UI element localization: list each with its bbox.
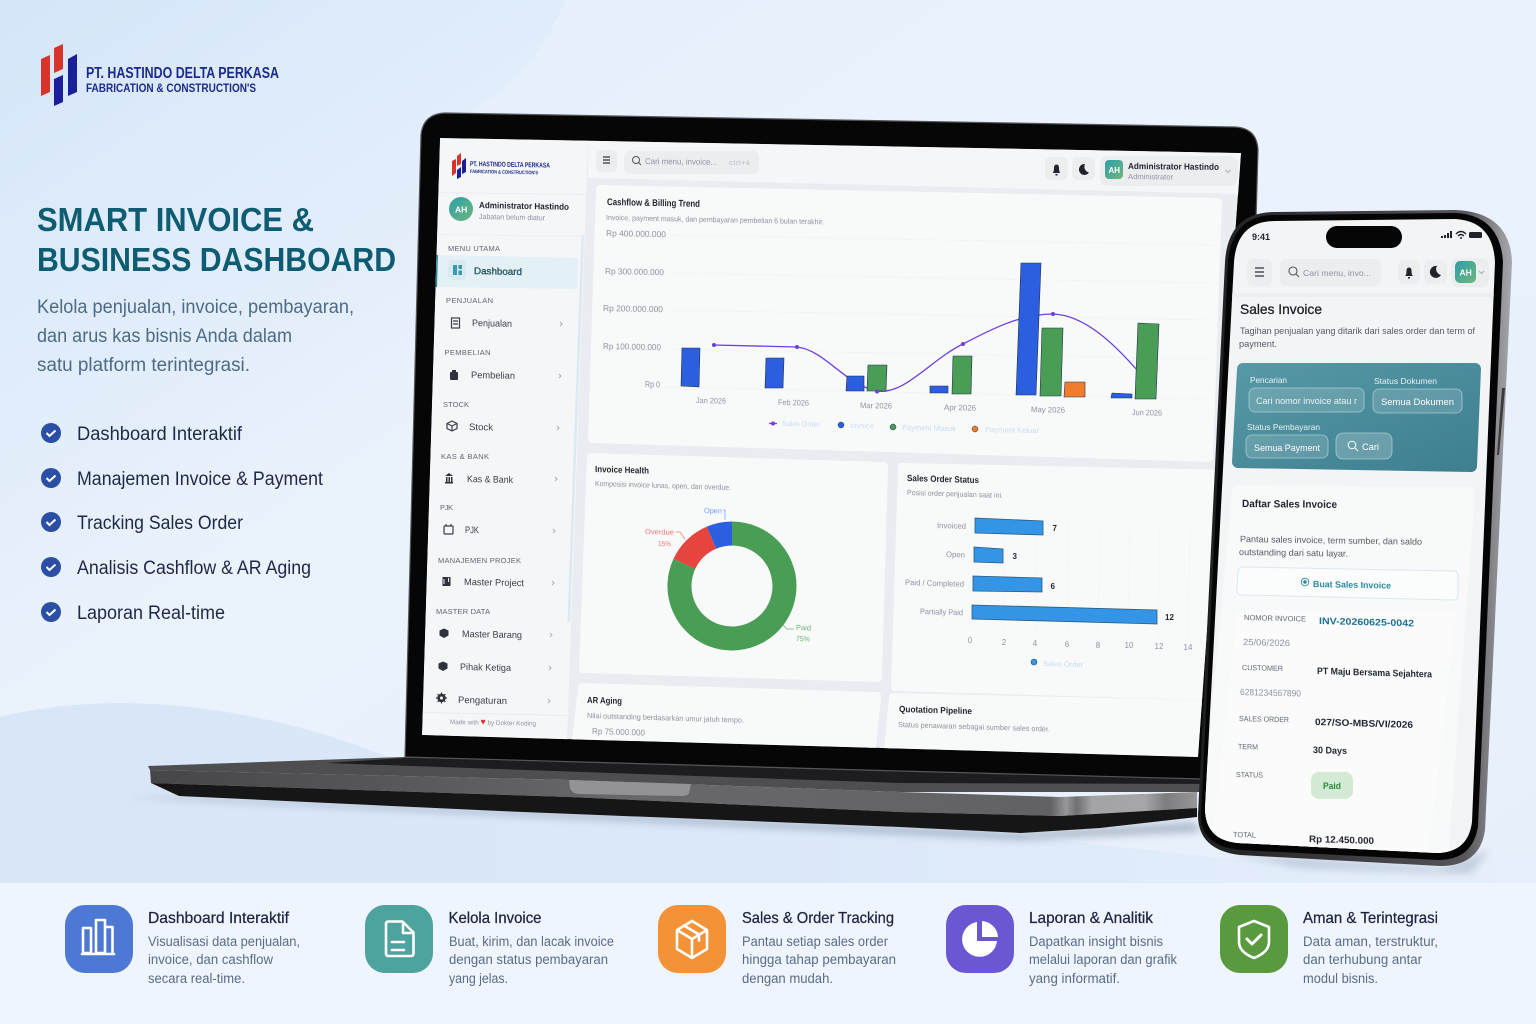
list card: outstanding dari satu layar. [1239,547,1348,559]
sidebar logo: PT. HASTINDO DELTA PERKASA [470,161,550,170]
bar legend [1030,658,1083,668]
bar values: 12 [1165,613,1174,622]
chart legend: Sales Order [782,419,820,429]
user chip [1100,156,1238,186]
card: AR aging: Rp 75.000.000 [592,726,645,738]
sidebar logo [452,153,550,179]
x axis labels: Mar 2026 [860,401,893,411]
y axis labels: Rp 300.000.000 [605,266,664,277]
feature checklist: Analisis Cashflow & AR Aging [77,558,311,579]
subtitle: Kelola penjualan, invoice, pembayaran, [37,297,354,318]
chart legend: Payment Keluar [985,425,1039,435]
icon: pie chart [946,905,1014,973]
feature: laporan dan analitik [946,905,1177,986]
phone body [1198,210,1512,866]
laptop lid [405,113,1258,780]
invoice detail card: INV-20260625-0042 [1319,616,1414,629]
phone top bar: AH [1460,268,1472,278]
filter panel: Semua Dokumen [1381,397,1454,408]
x axis labels: Jan 2026 [696,396,726,406]
donut chart [679,534,784,638]
hamburger button [596,150,617,172]
invoice detail card: CUSTOMER [1242,663,1284,673]
icon: shield [1220,905,1288,973]
filter panel: Semua Payment [1254,443,1320,454]
feature: aman dan terintegrasi: modul bisnis. [1303,971,1378,986]
search box: Cari menu, invoice... [645,156,717,167]
card: cashflow and billing trend: Invoice, payment masuk, dan pembayaran pembelian 6 bulan terakhir. [606,213,824,226]
feature: sales and order tracking: Pantau setiap sales order [742,934,888,949]
feature: dashboard interaktif: secara real-time. [148,971,245,986]
horizontal bars [972,518,1157,624]
title [37,201,396,278]
card: AR aging: Nilai outstanding berdasarkan umur jatuh tempo. [587,711,744,725]
laptop [125,113,1258,840]
create invoice button: Buat Sales Invoice [1313,579,1391,591]
bar labels: Paid / Completed [905,578,964,589]
icon: document [365,905,433,973]
feature checklist: Dashboard Interaktif [77,424,243,445]
donut labels: 15% [658,539,671,548]
x axis labels [696,398,1162,416]
feature: aman dan terintegrasi: Aman & Terintegrasi [1303,910,1438,927]
card: sales order status: Sales Order Status [907,473,979,485]
donut labels [645,506,811,643]
bar labels: Invoiced [937,521,966,531]
card: invoice health: Komposisi invoice lunas, open, dan overdue. [595,479,731,492]
card: quotation pipeline: Quotation Pipeline [899,704,972,716]
x axis values: 4 [1033,639,1038,648]
invoice detail card: 30 Days [1313,745,1347,757]
status bar [1252,226,1482,248]
feature: kelola invoice [365,905,614,986]
y axis labels: Rp 0 [645,379,660,389]
sidebar user [449,197,570,222]
filter panel: Status Pembayaran [1247,422,1320,432]
sidebar user: Administrator Hastindo [479,200,570,212]
card: invoice health: Invoice Health [595,464,649,476]
top bar [588,140,1241,194]
sidebar menu items: Stock [469,422,493,433]
card: sales order status [895,467,1240,697]
trend points [712,312,1055,394]
laptop screen [422,138,1241,790]
x axis values: 10 [1125,641,1134,650]
feature: laporan dan analitik: Dapatkan insight bisnis [1029,934,1163,949]
invoice detail card: PT Maju Bersama Sejahtera [1317,666,1433,680]
feature: sales and order tracking [658,905,896,986]
invoice detail card: 027/SO-MBS/VI/2026 [1315,717,1413,731]
invoice detail card: TOTAL [1233,830,1256,840]
x axis labels: Feb 2026 [778,398,809,408]
bar labels [905,521,966,617]
card: sales order status: Posisi order penjualan saat ini. [907,488,1003,500]
search box [624,151,759,174]
card: cashflow and billing trend: Cashflow & Billing Trend [607,197,700,210]
invoice detail card: STATUS [1236,770,1263,780]
sidebar section labels: PEMBELIAN [444,348,490,357]
y axis labels: Rp 400.000.000 [606,228,666,239]
page heading: Tagihan penjualan yang ditarik dari sales order dan term of [1240,326,1475,337]
title: BUSINESS DASHBOARD [37,241,396,278]
feature: laporan dan analitik: melalui laporan dan grafik [1029,952,1177,967]
bar values: 7 [1052,524,1058,533]
feature: kelola invoice: yang jelas. [449,971,508,986]
feature: kelola invoice: Kelola Invoice [448,910,542,927]
list card: Daftar Sales Invoice [1242,498,1337,511]
y axis labels: Rp 200.000.000 [603,303,663,314]
chart legend: Payment Masuk [902,423,956,433]
invoice detail card: Paid [1323,781,1341,792]
filter panel: Status Dokumen [1374,376,1437,386]
sidebar section labels: MANAJEMEN PROJEK [438,556,521,565]
sidebar user: Jabatan belum diatur [479,212,545,222]
sidebar menu items: Pihak Ketiga [460,662,512,674]
donut labels: Overdue [645,527,674,537]
invoice detail card: 25/06/2026 [1243,637,1290,648]
list card [1205,500,1458,853]
feature: sales and order tracking: hingga tahap pembayaran [742,952,896,967]
x axis values: 12 [1155,642,1164,651]
y axis labels [603,228,666,389]
icon: box [658,905,726,973]
icon: bar chart [65,905,133,973]
card: quotation pipeline [884,693,1202,757]
subtitle [37,297,354,376]
x axis values: 14 [1184,643,1193,652]
page heading [1239,301,1475,350]
y axis labels: Rp 100.000.000 [603,341,661,352]
sidebar menu items: Master Barang [462,629,522,641]
feature checklist: Tracking Sales Order [77,513,244,534]
feature checklist: Manajemen Invoice & Payment [77,469,324,490]
sidebar section labels [436,244,521,616]
user chip: AH [1108,166,1120,175]
feature: sales and order tracking: Sales & Order Tracking [742,910,894,927]
phone top bar: Cari menu, invo... [1303,268,1371,278]
feature checklist [41,423,324,624]
sidebar menu items: Pembelian [471,370,515,382]
menu: dashboard [435,255,578,289]
laptop base [148,757,1240,833]
bar legend: Sales Order [1043,659,1083,669]
invoice detail card: SALES ORDER [1239,714,1290,724]
search box: ctrl+k [729,158,750,167]
notification button [1045,157,1068,180]
card: quotation pipeline: Status penawaran sebagai sumber sales order. [898,720,1050,734]
sidebar logo: FABRICATION & CONSTRUCTION'S [470,169,539,176]
feature checklist: Laporan Real-time [77,603,225,624]
phone [1190,210,1512,900]
phone side button [1497,388,1505,455]
sidebar menu items: Master Project [464,577,524,589]
sidebar menu items [436,318,562,707]
invoice detail card: NOMOR INVOICE [1244,613,1306,624]
feature: dashboard interaktif: Dashboard Interaktif [148,910,290,927]
bottom feature band [0,883,1536,1024]
invoice detail card: 6281234567890 [1240,687,1301,699]
feature: sales and order tracking: dengan mudah. [742,971,833,986]
feature: laporan dan analitik: yang informatif. [1029,971,1120,986]
donut labels: Open [704,506,722,516]
x axis labels: May 2026 [1031,405,1066,415]
donut labels: 75% [796,634,810,643]
subtitle: satu platform terintegrasi. [37,355,250,376]
chart legend [769,420,1039,434]
filter panel: Pencarian [1250,375,1287,385]
filter panel [1238,369,1475,466]
sidebar menu items: Kas & Bank [467,474,513,486]
invoice detail card [1215,613,1452,850]
sidebar section labels: KAS & BANK [441,452,489,461]
feature: laporan dan analitik: Laporan & Analitik [1029,910,1154,927]
feature: kelola invoice: Buat, kirim, dan lacak invoice [449,934,614,949]
sidebar section labels: MASTER DATA [436,607,490,616]
donut labels: Paid [796,623,811,632]
x axis values [968,637,1192,650]
card: AR aging: AR Aging [587,695,622,706]
create invoice button [1237,567,1458,600]
x axis values: 0 [968,636,973,645]
sidebar section labels: PENJUALAN [446,296,493,305]
filter panel: Cari nomor invoice atau r [1256,396,1357,407]
x axis values: 2 [1002,638,1007,647]
bars [681,263,1159,399]
phone screen [1205,219,1495,853]
user chip: Administrator Hastindo [1128,161,1220,172]
card: cashflow and billing trend [592,189,1218,458]
bar values: 6 [1050,582,1056,591]
feature: dashboard interaktif [65,905,300,986]
logo: FABRICATION & CONSTRUCTION'S [86,81,256,95]
invoice detail card: Rp 12.450.000 [1309,834,1374,847]
feature: kelola invoice: dengan status pembayaran [449,952,608,967]
user chip: Administrator [1128,172,1174,181]
feature: dashboard interaktif: Visualisasi data penjualan, [148,934,300,949]
status bar: 9:41 [1252,232,1271,243]
sidebar menu items: Pengaturan [458,695,507,707]
subtitle: dan arus kas bisnis Anda dalam [37,326,292,347]
phone bezel [1201,213,1503,860]
feature: aman dan terintegrasi: Data aman, terstruktur, [1303,934,1438,949]
chart legend: Invoice [850,421,874,430]
bar labels: Open [946,550,965,560]
x axis values: 8 [1096,641,1101,650]
invoice detail card: TERM [1238,742,1258,751]
feature: aman dan terintegrasi [1220,905,1438,986]
menu: dashboard: Dashboard [474,266,522,278]
sidebar footer: Made with ♥ by Dokter Koding [450,716,536,728]
sidebar menu items: PJK [465,525,480,536]
feature: dashboard interaktif: invoice, dan cashflow [148,952,273,967]
bar values [1012,524,1174,622]
x axis labels: Jun 2026 [1132,408,1162,418]
sidebar [422,138,588,740]
logo: PT. HASTINDO DELTA PERKASA [86,65,279,82]
trend line [714,314,1137,391]
x axis values: 6 [1065,640,1070,649]
sidebar section labels: PJK [440,503,453,512]
card: invoice health [583,457,884,678]
logo [41,44,279,106]
bar labels: Partially Paid [920,607,963,617]
page heading: payment. [1239,339,1277,350]
sidebar user: AH [455,204,467,214]
theme button [1072,157,1095,180]
card: AR aging [572,683,881,748]
filter panel: Cari [1362,442,1379,453]
bar values: 3 [1012,552,1018,561]
x axis labels: Apr 2026 [944,403,977,413]
list card: Pantau sales invoice, term sumber, dan saldo [1240,534,1422,547]
title: SMART INVOICE & [37,201,314,238]
phone top bar [1232,261,1494,297]
sidebar section labels: STOCK [443,400,469,409]
page heading: Sales Invoice [1240,301,1322,317]
sidebar menu items: Penjualan [472,318,512,330]
feature: aman dan terintegrasi: dan terhubung antar [1303,952,1422,967]
sidebar section labels: MENU UTAMA [448,244,500,253]
